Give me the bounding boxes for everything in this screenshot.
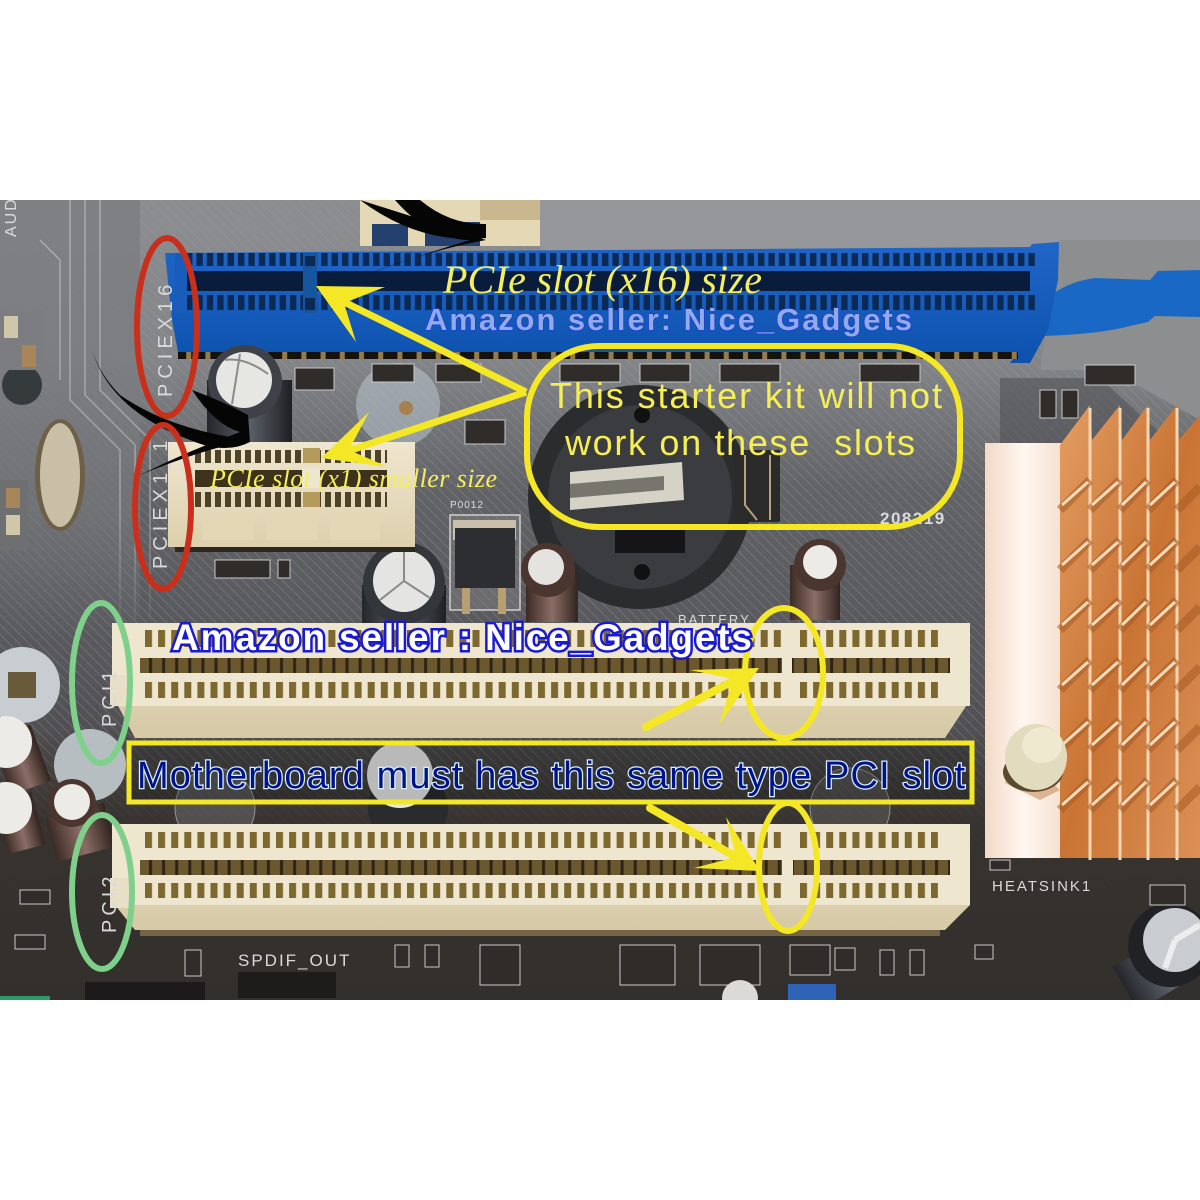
header and blue jumper — [0, 972, 1200, 1020]
PCI slot 1 — [110, 623, 970, 738]
black scribble top — [360, 200, 486, 276]
red ellipse: PCIEX1 — [135, 425, 191, 589]
capacitor in front of the x16 slot — [207, 345, 292, 444]
heatsink push pin — [1003, 724, 1067, 792]
circuit board base — [0, 200, 1200, 1000]
callout: motherboard requirement: Motherboard must has this same type PCI slot — [137, 755, 965, 797]
silkscreen labels: BATTERY — [678, 612, 751, 627]
watermark: seller on PCI1: Amazon seller : Nice_Gadgets — [172, 617, 752, 658]
top connector — [360, 200, 540, 246]
silkscreen labels: PCIEX16 — [155, 280, 177, 397]
callout: motherboard requirement — [129, 743, 972, 802]
heatsink — [985, 405, 1200, 860]
watermark: seller on x16 slot: Amazon seller: Nice_Gadgets — [425, 302, 912, 337]
red ellipse: PCIEX16 — [137, 238, 197, 416]
black scribble left — [92, 350, 250, 475]
silkscreen labels — [3, 197, 1092, 970]
silkscreen labels: 208219 — [880, 509, 946, 528]
silkscreen labels: HEATSINK1 — [992, 878, 1092, 895]
label: PCIe x16 size: PCIe slot (x16) size — [442, 257, 762, 302]
crystal and inductor — [0, 310, 85, 550]
arrow: to PCI2 key — [650, 808, 760, 871]
arrow: to x1 slot — [321, 392, 526, 467]
silkscreen labels: P0012 — [450, 500, 484, 511]
small surface-mount parts — [15, 364, 1185, 985]
silkscreen labels: SPDIF_OUT — [238, 951, 351, 970]
silkscreen labels: PCI2 — [99, 873, 121, 933]
silkscreen labels: PCIEX1_1 — [150, 436, 172, 569]
CMOS battery holder — [528, 385, 780, 609]
green ellipse: PCI2 — [72, 815, 132, 969]
yellow ellipse: PCI2 key — [759, 803, 817, 931]
green ellipse: PCI1 — [72, 603, 130, 763]
arrow: to PCI1 key — [646, 668, 759, 727]
callout: starter kit warning: This starter kit will not — [550, 375, 942, 416]
label: PCIe x1 size: PCIe slot (x1) smaller size — [209, 464, 497, 493]
motherboard photo — [0, 197, 1200, 1020]
silkscreen labels: AUD — [3, 197, 20, 237]
callout: starter kit warning — [527, 346, 960, 527]
PCI slot 2 — [110, 824, 970, 936]
PCIe x16 blue slot — [165, 242, 1200, 363]
transistor P0012 — [450, 515, 520, 614]
silkscreen labels: PCI1 — [99, 667, 121, 727]
capacitors behind the slots — [0, 363, 1200, 1010]
arrow: to x16 slot — [316, 286, 526, 392]
PCIe x1 cream slot — [168, 442, 415, 552]
callout: starter kit warning: work on these slots — [564, 422, 915, 463]
yellow ellipse: PCI1 key — [745, 608, 823, 738]
